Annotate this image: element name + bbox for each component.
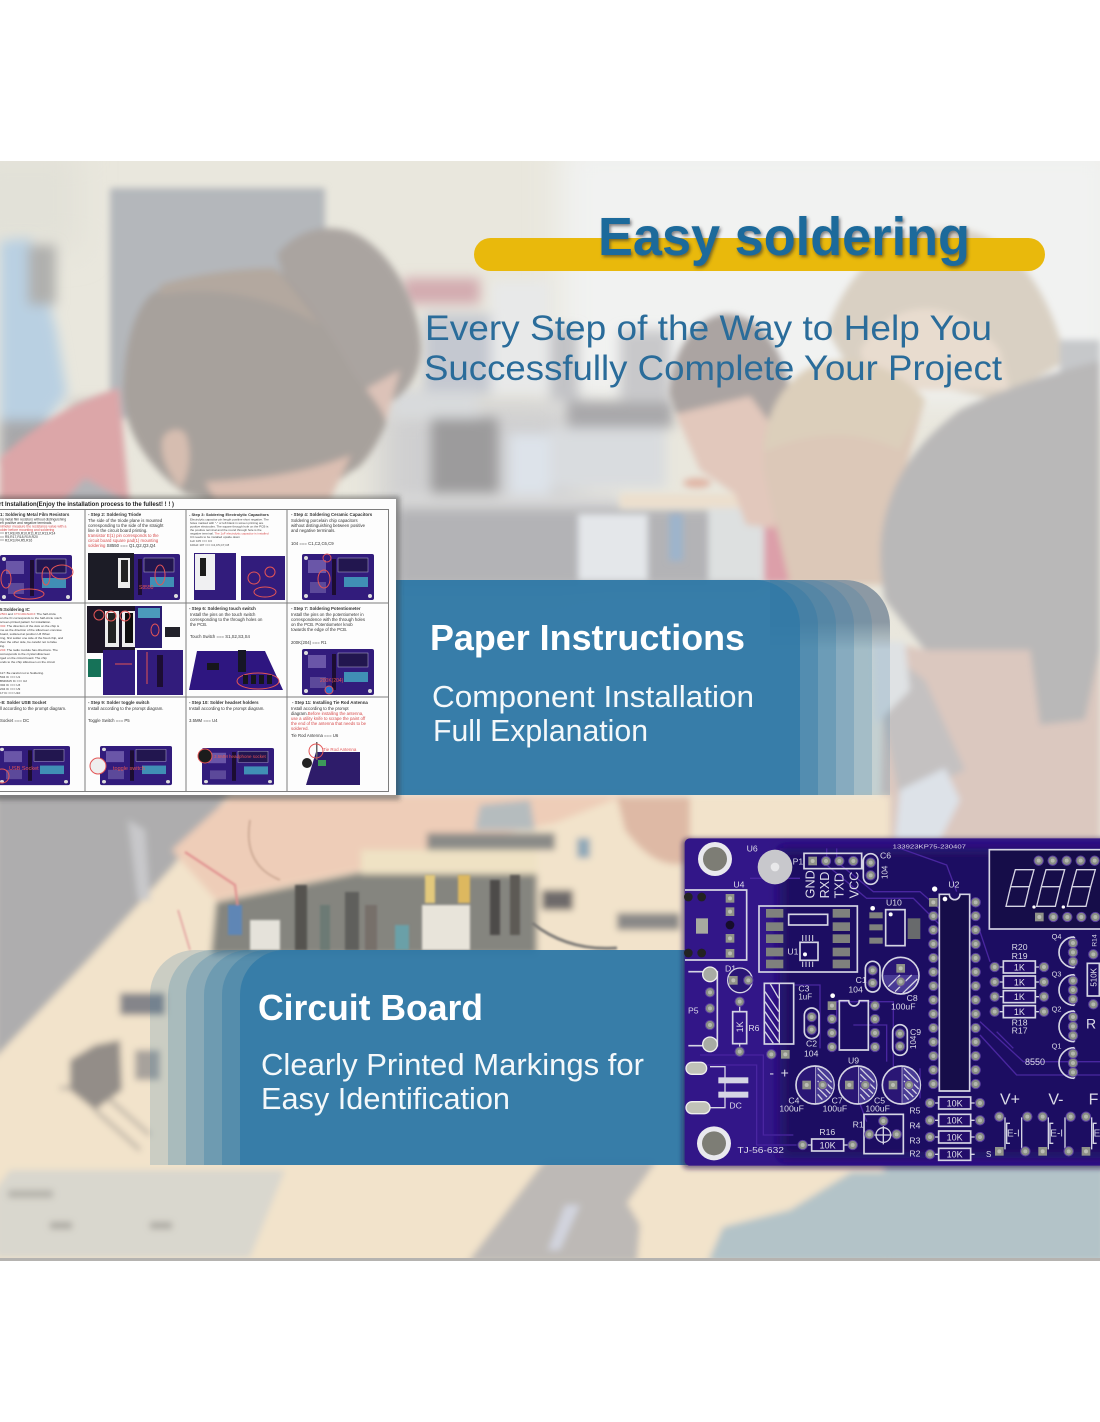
right hand <box>617 797 690 864</box>
step 11: soldered. <box>291 726 309 731</box>
silkscreen labels: C7 <box>832 1095 843 1105</box>
board substrate <box>685 838 1100 1166</box>
step 3: holes marked with "-" or left blank in screen printing are <box>190 521 264 525</box>
yellow highlight bar <box>474 238 1045 271</box>
silkscreen labels: C3 <box>798 984 810 994</box>
heading: paper instructions: Paper Instructions <box>430 617 745 658</box>
U1 module <box>759 906 857 972</box>
step 5: 5:Soldering IC <box>0 607 31 612</box>
resistor R14 <box>1087 950 1099 1009</box>
step 10 <box>189 700 274 785</box>
step 5: 17 IC === U10 <box>0 691 20 695</box>
description: Component Installation <box>432 679 754 714</box>
step 5: corresponds to the crystal silkscreen <box>0 652 50 656</box>
silkscreen labels: VCC <box>847 872 861 898</box>
step 11: Tie Rod Antenna <box>323 747 357 752</box>
step 10: 3.5MM headphone socket <box>214 754 267 759</box>
potentiometer R1 <box>864 1114 903 1154</box>
step 5: 204 IC === U9 <box>0 687 20 691</box>
step 1: == R5,R17,R18,R19,R20 <box>0 535 38 539</box>
silkscreen labels: U1 <box>787 946 799 956</box>
panel: paper instructions <box>396 580 890 795</box>
silkscreen labels: U9 <box>848 1056 859 1066</box>
silkscreen labels: V+ <box>1000 1091 1020 1108</box>
stacked translucent panel layers <box>150 950 700 1165</box>
P5 switch <box>688 967 717 1052</box>
step 6: the PCB. <box>190 622 207 627</box>
step 6: - Step 6: Soldering touch switch <box>189 606 256 611</box>
description: Clearly Printed Markings for <box>261 1047 644 1082</box>
step 9: Toggle Switch === P5 <box>88 718 130 723</box>
gray strap on table <box>468 1160 657 1262</box>
subtitle <box>424 308 1002 388</box>
silkscreen labels: C5 <box>874 1095 885 1105</box>
step 7: on the PCB. Potentiometer knob <box>291 622 353 627</box>
silkscreen labels: 104 <box>848 984 863 994</box>
silkscreen labels: 104 <box>909 1035 918 1049</box>
touch switches <box>995 1112 1100 1156</box>
silkscreen labels: R19 <box>1012 951 1028 961</box>
step 3: 1uF 105 === C3 <box>190 539 212 543</box>
table <box>0 795 890 1265</box>
step 9: toggle switch <box>113 766 145 772</box>
photo bottom edge line <box>0 1258 1100 1261</box>
step 5: 117: Be careful not to Soldering. <box>0 671 44 675</box>
step 3: positive electrodes. The square through hole on the PCB is <box>190 524 269 528</box>
step 2: - Step 2: Soldering Triode <box>88 512 142 517</box>
electronics details <box>178 820 617 950</box>
sheet grid <box>0 510 388 792</box>
step 5: 302: The direction of the dots on the chip is <box>0 624 60 628</box>
silkscreen labels: R17 <box>1012 1026 1028 1036</box>
step 5: 302 IC === U3 <box>0 683 20 687</box>
step 1: 1: Soldering Metal Film Resistors <box>0 512 70 517</box>
step 5: me as the direction of the silkscreen concave <box>0 628 62 632</box>
U7 seven-segment display <box>989 850 1100 929</box>
step 11: - Step 11: Installing Tie Rod Antenna <box>292 700 368 705</box>
step 5: 204: The radio module has directions. The <box>0 648 58 652</box>
step 8: ll according to the prompt diagram. <box>0 706 66 711</box>
step 5: BNK8A5 IC === U2 <box>0 679 27 683</box>
silkscreen labels: C2 <box>806 1038 817 1048</box>
silkscreen labels: S <box>986 1150 991 1159</box>
step 10: 3.5MM === U4 <box>189 718 218 723</box>
silkscreen labels: 100uF <box>865 1104 890 1114</box>
P1 header <box>804 853 862 869</box>
silkscreen labels: V- <box>1048 1091 1063 1108</box>
step 5 <box>0 607 63 695</box>
silkscreen labels: R16 <box>819 1127 835 1137</box>
U4 connector <box>684 890 747 960</box>
silkscreen labels: P5 <box>688 1006 699 1016</box>
step 1 <box>0 512 73 601</box>
description <box>432 679 754 748</box>
resistor R14: 510K <box>1090 967 1099 987</box>
silkscreen labels: 8550 <box>1025 1057 1045 1067</box>
silkscreen labels: 100uF <box>891 1002 916 1012</box>
step 1: == R7,R8,R9,R10,R11,R12,R13,R14 <box>0 532 55 536</box>
circuit board photo <box>684 838 1100 1166</box>
silkscreen labels: 104 <box>804 1048 819 1058</box>
step 5: rged on the circuit board. The chip <box>0 656 47 660</box>
sheet title: rt Installation(Enjoy the installation process to the fullest! ! ! ) <box>0 501 174 508</box>
step 6: Install the pins on the touch switch <box>190 612 256 617</box>
background photo: students soldering in a classroom <box>0 140 1100 1265</box>
silkscreen labels: U10 <box>886 898 902 908</box>
step 9 <box>88 700 172 785</box>
step 4 <box>291 512 374 600</box>
capacitors C4 C7 C5 <box>796 1066 920 1104</box>
silkscreen labels: R4 <box>909 1120 921 1130</box>
step 3: the positive terminal and the round through hole is the <box>190 528 262 532</box>
transistors Q4 Q3 Q2 Q1 <box>1059 937 1078 1078</box>
step 5: board, soldered at position U3 When <box>0 632 50 636</box>
title banner <box>474 207 1045 271</box>
step 2: circuit board square pad(1) mounting <box>88 538 159 543</box>
panel: circuit board <box>150 950 700 1165</box>
step 4: - Step 4: Soldering Ceramic Capacitors <box>291 512 373 517</box>
instruction sheet <box>0 499 396 795</box>
step 3: - Step 3: Soldering Electrolytic Capacitors <box>189 512 270 517</box>
silkscreen labels: DC <box>729 1100 742 1110</box>
step 3: negative terminal. The 1uF electrolytic capacitor is installed <box>190 532 269 536</box>
front head <box>123 268 386 500</box>
silkscreen labels: R5 <box>909 1106 921 1116</box>
step 3: Electrolytic capacitor pin length positive short negative. The <box>190 518 269 522</box>
silkscreen labels: 100uF <box>823 1104 847 1114</box>
U10 chip <box>869 906 920 946</box>
step 7: towards the edge of the PCB. <box>291 627 347 632</box>
step 5: ring, first solder one side of the fixed chip, and <box>0 636 63 640</box>
silkscreen labels: Q4 <box>1052 932 1061 941</box>
step 6 <box>189 606 283 690</box>
step 10: - Step 10: Solder headset holders <box>189 700 259 705</box>
silkscreen labels: - <box>769 1065 774 1081</box>
silkscreen labels: P1 <box>793 856 803 866</box>
circuit board shadow <box>682 838 1100 1169</box>
step 2: The side of the triode plane is mounted <box>88 518 163 523</box>
R6 resistor <box>733 997 747 1056</box>
silkscreen labels: R2 <box>909 1148 921 1158</box>
silkscreen labels: U4 <box>733 880 745 890</box>
heading: Easy soldering: Easy soldering <box>598 207 970 267</box>
copper traces <box>690 848 1100 1145</box>
step 5: then the other side, be careful not to false <box>0 640 57 644</box>
step 7: - Step 7: Soldering Potentiometer <box>291 606 361 611</box>
step 1: en positive and negative terminals. <box>0 521 52 525</box>
step 11: the end of the antenna that needs to be <box>291 721 367 726</box>
step 5: screen-printed pattern for installation. <box>0 620 51 624</box>
step 8 <box>0 700 70 785</box>
step 9: - Step 9: Solder toggle switch <box>88 700 150 705</box>
step 11: use a utility knife to scrape the paint off <box>291 716 366 721</box>
step 5: onds to the chip silkscreen on the circuit <box>0 660 55 664</box>
step 11: diagram.Before installing the antenna, <box>291 711 363 716</box>
gray hair seen through panel corner <box>770 580 890 650</box>
step 3: C3 needs to be installed upside down <box>190 535 240 539</box>
step 2: soldering S8550 === Q1,Q2,Q3,Q4 <box>88 543 156 548</box>
step 1: == R2,R3,R4,R5,R16 <box>0 538 32 542</box>
step 7: 200K(204) === R1 <box>291 640 327 645</box>
silkscreen labels: Q3 <box>1052 969 1061 978</box>
R6 resistor: 1K <box>735 1021 745 1032</box>
silkscreen labels: C6 <box>880 850 891 860</box>
step 4: and negative terminals. <box>291 528 335 533</box>
step 5: 2504 and CTC100xNAK3: The half-circle <box>0 612 56 616</box>
silkscreen labels: R <box>1086 1015 1096 1031</box>
step 1: ng metal film resistors without distinguishing <box>0 518 66 522</box>
silkscreen labels: F <box>1089 1091 1099 1108</box>
step 7: 200K(204) <box>320 678 344 684</box>
step 7: correspondence with the through holes <box>291 617 365 622</box>
step 1: older before mounting and soldering <box>0 528 54 532</box>
silkscreen labels: RXD <box>818 872 832 898</box>
subtitle: Every Step of the Way to Help You <box>425 308 992 348</box>
table parts <box>542 890 573 910</box>
step 2: corresponding to the side of the straight <box>88 523 164 528</box>
step 1: nimeter measure the resistance value with a <box>0 524 66 528</box>
silkscreen labels: U7 <box>993 853 1002 862</box>
gray sleeve <box>0 790 232 1058</box>
step 7: Install the pins on the potentiometer in <box>291 612 364 617</box>
silkscreen labels: TXD <box>833 873 847 898</box>
breadboard on table <box>0 1170 285 1258</box>
silkscreen labels: + <box>781 1065 789 1081</box>
silkscreen labels: U6 <box>747 844 758 854</box>
step 5: on the IC corresponds to the half-circle notch <box>0 616 62 620</box>
foreground gray hair head <box>880 361 1100 725</box>
step 2 <box>88 512 180 600</box>
step 4: Soldering porcelain chip capacitors <box>291 518 358 523</box>
instruction sheet shadow <box>0 496 400 800</box>
step 5 photos <box>87 606 183 695</box>
electronics kit on table <box>211 872 537 955</box>
capacitors C6 C1 C2 C9 <box>804 854 907 1055</box>
door and wall <box>110 188 325 418</box>
step 2: S8550 <box>139 585 154 591</box>
subtitle: Successfully Complete Your Project <box>424 348 1002 388</box>
step 5: ing. <box>0 644 5 648</box>
silkscreen labels: C8 <box>907 993 918 1003</box>
resistors R5 R4 R3 R2 <box>925 1097 985 1160</box>
silkscreen labels: R14 <box>1092 934 1099 947</box>
foreground blond head <box>772 408 924 588</box>
step 6: corresponding to the through holes on <box>190 617 263 622</box>
silkscreen labels: U2 <box>948 880 960 890</box>
silkscreen labels: C1 <box>856 975 867 985</box>
step 8: USB Socket <box>9 766 39 772</box>
heading: circuit board: Circuit Board <box>258 987 483 1028</box>
step 7 <box>291 606 374 695</box>
silkscreen labels: TJ-56-632 <box>737 1146 785 1155</box>
blond girl in back <box>827 228 1066 400</box>
step 4: without distinguishing between positive <box>291 523 366 528</box>
step 4: 104 === C1,C2,C6,C9 <box>291 541 334 546</box>
capacitor C8 <box>882 957 919 994</box>
silkscreen labels: R18 <box>1012 1018 1028 1028</box>
D1 diode <box>728 968 753 993</box>
step 11: Tie Rod Antenna === U6 <box>291 733 339 738</box>
step 9: Install according to the prompt diagram. <box>88 706 163 711</box>
U6 antenna pad <box>758 850 792 884</box>
silkscreen labels: D1 <box>725 964 736 974</box>
description: Easy Identification <box>261 1081 510 1116</box>
step 11: Install according to the prompt <box>291 706 349 711</box>
silkscreen labels <box>688 844 1099 1159</box>
step 10: Install according to the prompt diagram. <box>189 706 264 711</box>
silkscreen labels: R1 <box>853 1120 864 1130</box>
silkscreen labels: C4 <box>788 1095 800 1105</box>
silkscreen labels: 133923KP75-230407 <box>893 844 966 850</box>
silkscreen labels: 104 <box>880 865 889 879</box>
resistors R20 R19 R18 R17 <box>990 961 1049 1018</box>
resistor R16 <box>798 1139 857 1151</box>
U9 chip <box>827 993 880 1052</box>
silkscreen labels: R20 <box>1012 942 1028 952</box>
arm <box>172 795 625 900</box>
silkscreen labels: GND <box>803 870 817 898</box>
description <box>261 1047 644 1116</box>
step 8: Socket === DC <box>0 718 29 723</box>
mounting holes <box>697 842 732 1160</box>
DC jack <box>686 1062 748 1114</box>
back head <box>277 228 421 410</box>
silkscreen labels: C9 <box>910 1027 921 1037</box>
red shirt <box>0 388 130 510</box>
silkscreen labels: 1uF <box>798 993 812 1002</box>
U2 chip socket <box>929 886 980 1091</box>
silkscreen labels: R6 <box>748 1023 760 1033</box>
silkscreen labels: 100uF <box>779 1104 804 1114</box>
silkscreen labels: R3 <box>909 1135 921 1145</box>
description: Full Explanation <box>433 713 648 748</box>
step 3: 100uF 107 === C4,C5,C7,C8 <box>190 543 229 547</box>
silkscreen labels: Q1 <box>1052 1041 1061 1050</box>
step 8: -8: Solder USB Socket <box>0 700 47 705</box>
capacitor C3 <box>764 983 794 1059</box>
teal trousers on the lower right <box>708 1160 1100 1262</box>
brunette student <box>669 314 790 440</box>
step 6: Touch Switch === S1,S2,S3,S4 <box>190 634 250 639</box>
stacked translucent panel layers <box>396 580 890 795</box>
step 3 <box>189 512 285 600</box>
step 2: line in the circuit board printing. <box>88 528 147 533</box>
silkscreen labels: Q2 <box>1052 1005 1061 1014</box>
step 5: 504 IC === U1 <box>0 675 20 679</box>
step 11 <box>291 700 368 785</box>
step 2: transistor E(1) pin corresponds to the <box>88 533 159 538</box>
